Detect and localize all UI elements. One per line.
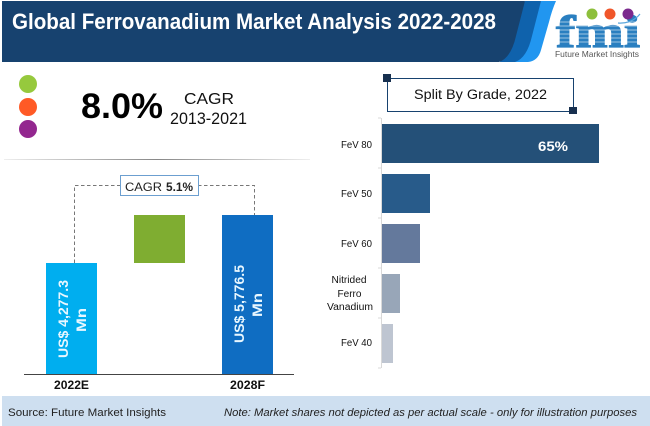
bar: 2022E (46, 263, 97, 374)
bar: Nitrided Ferro Vanadium: Vanadium (327, 302, 373, 313)
bar: 2028F: Mn (249, 293, 265, 317)
header banner (2, 1, 556, 62)
callout: CAGR 5.1%: CAGR (125, 180, 162, 194)
icon: fmi logo: fmi (556, 6, 640, 57)
bar: increment (134, 215, 185, 263)
stat: 8.0% CAGR: CAGR (184, 91, 234, 108)
CAGR connector (74, 176, 254, 263)
bar: Nitrided Ferro Vanadium: Ferro (338, 289, 362, 300)
bar: FeV 60 (341, 224, 420, 263)
bar: 2022E: Mn (73, 308, 89, 332)
icon: fmi logo: Future Market Insights (555, 50, 639, 59)
bar: FeV 40 (341, 324, 393, 363)
callout: CAGR 5.1%: 5.1% (166, 180, 193, 194)
chart heading: split by grade (383, 74, 577, 114)
bar: FeV 60: FeV 60 (341, 239, 372, 250)
stat: 8.0% CAGR: 8.0% (81, 87, 163, 126)
axis label: 2028F: 2028F (230, 380, 265, 392)
note: Note: Market shares not depicted as per actual scale - only for illustration purposes (224, 407, 638, 419)
bar: 2022E: US$ 4,277.3 (55, 280, 71, 358)
bar: 2028F: US$ 5,776.5 (231, 265, 247, 343)
bar: FeV 50: FeV 50 (341, 189, 372, 200)
axis label: 2022E: 2022E (54, 380, 89, 392)
chart heading: split by grade: Split By Grade, 2022 (414, 87, 547, 102)
legend dots (19, 75, 37, 138)
bar: FeV 40: FeV 40 (341, 338, 372, 349)
bar chart: market value (24, 215, 294, 392)
bar: Nitrided Ferro Vanadium: Nitrided (332, 275, 366, 286)
footer (2, 396, 650, 426)
callout: CAGR 5.1% (120, 176, 198, 196)
bar: Nitrided Ferro Vanadium (327, 274, 400, 313)
bar: FeV 80: FeV 80 (341, 140, 372, 151)
bar: FeV 80 (341, 124, 599, 163)
bar: FeV 80: 65% (538, 139, 568, 154)
source: Source: Future Market Insights (8, 407, 167, 419)
stat: 8.0% CAGR (81, 87, 247, 128)
stat: 8.0% CAGR: 2013-2021 (170, 110, 247, 128)
bar: FeV 50 (341, 174, 430, 213)
bar: 2028F (222, 215, 273, 374)
title: Global Ferrovanadium Market Analysis 2022-2028 (12, 9, 496, 34)
bar chart: split by grade (327, 118, 599, 368)
